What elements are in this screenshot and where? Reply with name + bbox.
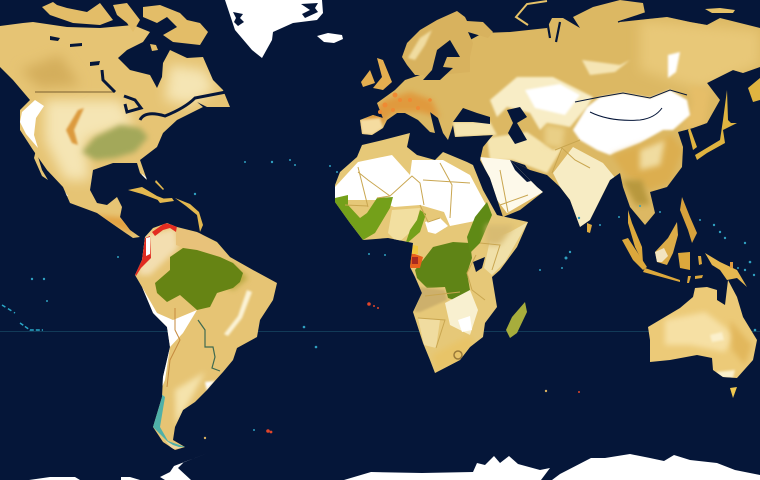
islands: Southeast Asia [587,197,747,287]
landmass: Eurasia [360,0,760,227]
islands: British Isles [361,58,392,90]
landmass: Greenland [225,0,323,58]
landmass: Scandinavia [402,11,493,80]
island: Madagascar [506,302,527,338]
landmass: North America [0,22,230,238]
islands: Caribbean [128,180,203,232]
landmass: Antarctica [29,453,760,480]
landmass: Africa [335,133,528,373]
islands: scattered ocean specks [2,159,756,439]
islands: Japan, Sakhalin and Korea [688,78,760,160]
islands: Mediterranean and Arctic Russia [516,1,735,25]
equator line [0,331,760,332]
landmass: Australia [648,280,757,398]
islands: Arctic Canada [42,2,208,51]
landmass: South America [134,223,277,450]
island: Iceland [317,33,343,43]
